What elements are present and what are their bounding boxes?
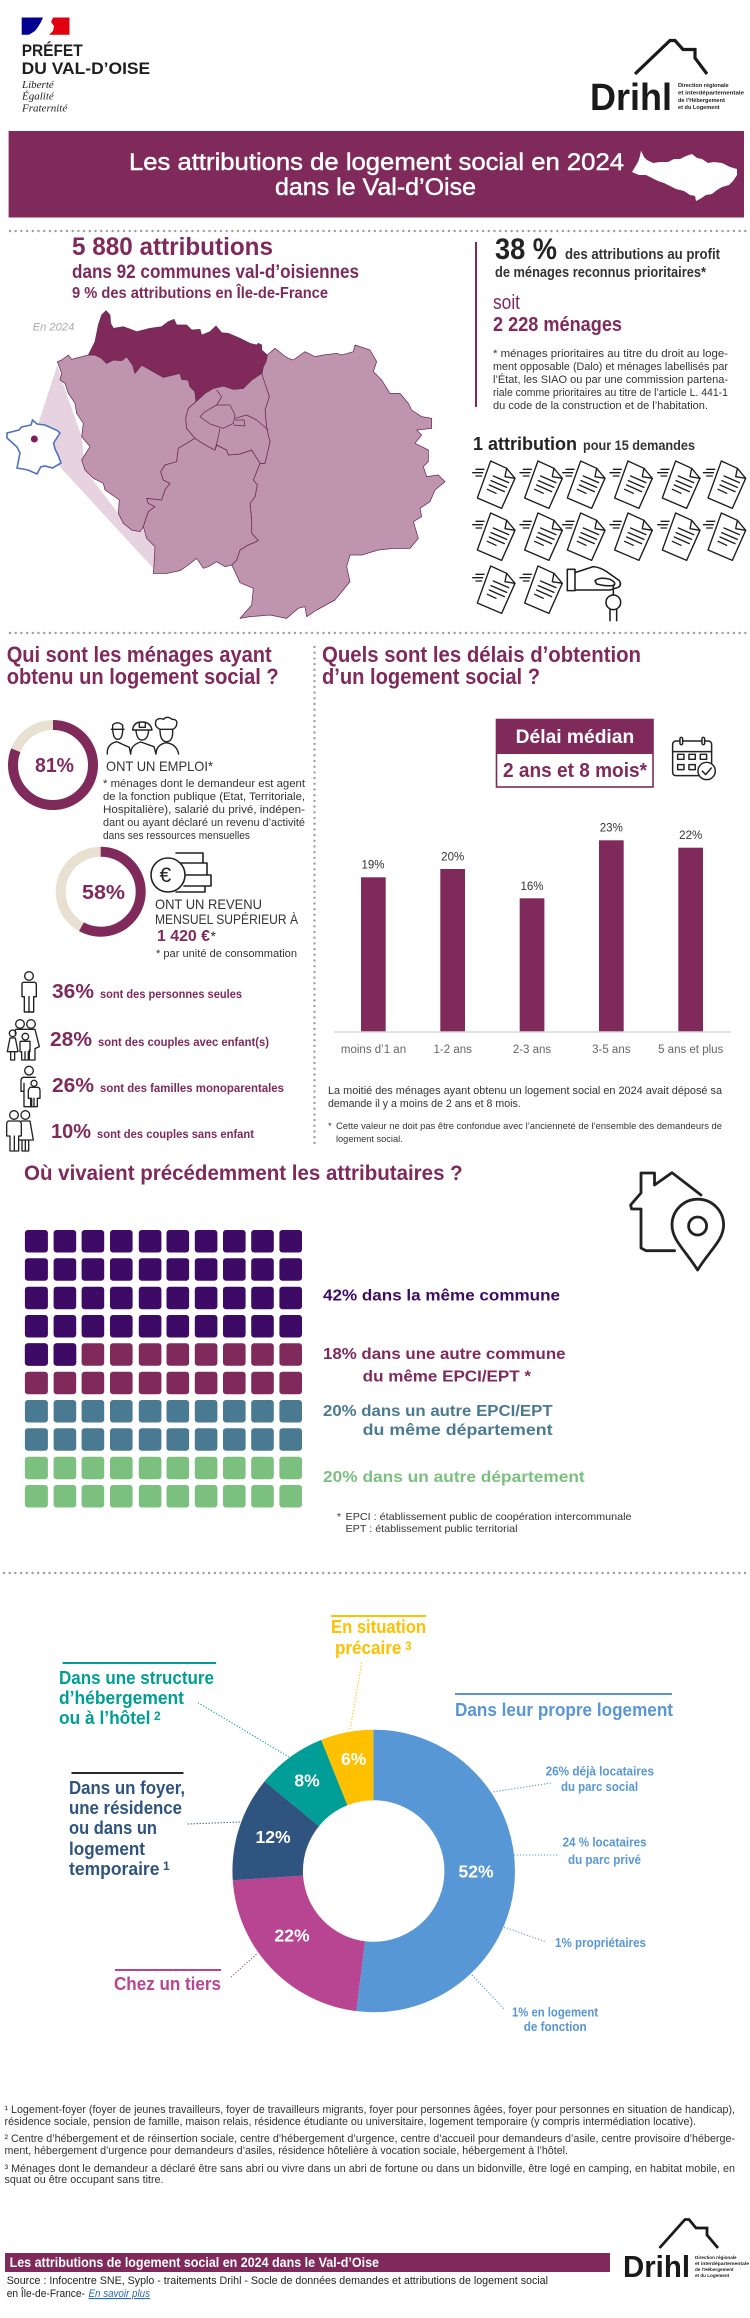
heading: 5 880 attributions	[72, 233, 359, 302]
wedge towards France	[37, 365, 155, 568]
logo: Préfet du Val-d'Oise: Fraternité	[21, 102, 68, 114]
footer banner: Les attributions de logement social en 2024 dans le Val-d’Oise	[10, 2254, 379, 2270]
heading: 1 attribution pour 15 demandes: pour 15 demandes	[583, 438, 695, 453]
bar chart: délais: 23%	[600, 823, 623, 835]
donut: 81%	[13, 725, 93, 805]
footnote: priority households: riale comme prioritaires au titre de l’article L. 441-1	[493, 387, 728, 399]
heading: Où vivaient: Où vivaient précédemment les attributaires ?	[24, 1162, 463, 1185]
footnote: priority households: * ménages prioritaires au titre du droit au loge-	[493, 348, 728, 360]
callout: délai médian: Délai médian	[516, 727, 634, 748]
title: Les attributions de logement social en 2024	[129, 149, 624, 176]
callout: structure d'hébergement	[59, 1662, 289, 1757]
text: explication délai	[328, 1085, 722, 1110]
text: revenu mensuel: ONT UN REVENU	[155, 896, 262, 912]
text: revenu mensuel: MENSUEL SUPÉRIEUR À	[155, 911, 299, 927]
logo: Préfet du Val-d'Oise: PRÉFET	[22, 41, 83, 60]
donut: 58%: 58%	[82, 882, 125, 904]
detail: 26%: du parc social	[561, 1780, 638, 1794]
footnote: EPCI: *	[337, 1512, 341, 1523]
callout: foyer	[69, 1772, 241, 1879]
legend: 20% EPCI	[323, 1403, 553, 1439]
footnote: délai	[328, 1121, 722, 1145]
icon: workers	[107, 717, 179, 754]
pictogram: 14 documents	[473, 461, 746, 613]
logo: Préfet du Val-d'Oise: Égalité	[21, 90, 55, 102]
detail: 1% propriétaires: 1% propriétaires	[555, 1936, 646, 1950]
footnote: priority households	[493, 348, 728, 412]
footnote: employment: * ménages dont le demandeur est agent	[103, 778, 305, 790]
logo: Préfet du Val-d'Oise	[21, 18, 150, 114]
callout: foyer: Dans un foyer,	[69, 1778, 185, 1798]
stat: 2 228 households: 2 228 ménages	[493, 314, 622, 336]
stat: 2 228 households	[493, 292, 622, 336]
logo: Drihl	[590, 40, 744, 119]
logo: Préfet du Val-d'Oise: Liberté	[21, 79, 55, 91]
donut chart: situation antérieure: 52%	[458, 1862, 494, 1882]
text: revenu mensuel: 1 420 €	[157, 928, 210, 945]
callout: en situation précaire: En situation	[331, 1617, 426, 1637]
text: revenu mensuel: * par unité de consommation	[156, 948, 297, 960]
divider	[4, 1572, 746, 1574]
callout: en situation précaire: précaire	[335, 1638, 401, 1658]
detail: 1% logement de fonction	[472, 1975, 599, 2034]
legend: 20% EPCI: du même département	[363, 1422, 553, 1439]
logo: Préfet du Val-d'Oise: DU VAL-D’OISE	[22, 59, 150, 78]
callout: structure d'hébergement: Dans une structure	[59, 1668, 214, 1688]
text: revenu mensuel: *	[210, 928, 216, 944]
icon: coins	[151, 853, 211, 892]
logo: Drihl: et interdépartementale	[678, 90, 744, 96]
icon: coins: €	[160, 864, 172, 887]
divider	[10, 230, 746, 232]
footnotes 1 2 3: ² Centre d’hébergement et de réinsertion sociale, centre d’hébergement d’urgence, centre d’accueil pour demandeurs d’asile, centre provisoire d’héberge-	[4, 2133, 735, 2145]
legend: 18%: 18% dans une autre commune	[323, 1346, 566, 1363]
callout: en situation précaire: 3	[405, 1639, 412, 1653]
heading: 1 attribution pour 15 demandes: 1 attribution	[473, 433, 577, 454]
logo: Drihl: Drihl	[590, 77, 672, 119]
callout: chez un tiers	[114, 1953, 258, 1994]
heading: Qui sont les ménages: Qui sont les ménages ayant	[7, 642, 272, 667]
vertical divider	[313, 647, 316, 1147]
logo: Drihl: et du Logement	[678, 105, 720, 111]
footnote: employment	[103, 778, 306, 842]
callout: foyer: logement	[69, 1839, 145, 1859]
icon: hand holding key	[567, 567, 621, 621]
stat: 28%: 28%	[50, 1028, 92, 1051]
waffle chart	[25, 1230, 302, 1508]
stat: 10%: 10%	[51, 1120, 91, 1143]
heading: Quels sont les délais: Quels sont les délais d’obtention	[322, 642, 641, 667]
footnote: EPCI: EPCI : établissement public de coopération intercommunale	[346, 1512, 632, 1523]
France outline	[7, 420, 61, 474]
detail: 24%	[514, 1836, 647, 1867]
text: revenu mensuel	[155, 896, 299, 960]
bar chart: délais: 16%	[520, 881, 544, 893]
stat: 26%	[52, 1074, 284, 1097]
legend: 42%: 42% dans la même commune	[323, 1288, 560, 1305]
callout: délai médian: 2 ans et 8 mois*	[503, 760, 647, 782]
heading: Qui sont les ménages: obtenu un logement social ?	[7, 664, 279, 689]
icon: single parent family	[21, 1066, 40, 1107]
detail: 26%	[492, 1765, 654, 1794]
title: dans le Val-d’Oise	[275, 174, 476, 201]
source: En savoir plus	[88, 2288, 150, 2300]
callout: dans leur propre logement: Dans leur propre logement	[455, 1700, 673, 1720]
footnotes 1 2 3: résidence sociale, pension de famille, maison relais, résidence étudiante ou universitaire, logement temporaire (y compris intermédiation locative).	[4, 2116, 696, 2128]
Essonne	[143, 438, 260, 573]
legend: 18%	[323, 1346, 566, 1386]
title banner	[9, 131, 744, 218]
detail: 1% logement de fonction: de fonction	[524, 2020, 587, 2034]
callout: foyer: temporaire	[69, 1859, 160, 1879]
stat: 2 228 households: soit	[493, 292, 520, 314]
donut chart: situation antérieure	[255, 1749, 494, 1977]
donut: 81%: 81%	[35, 755, 74, 777]
callout: structure d'hébergement: ou à l’hôtel	[59, 1708, 150, 1728]
bar chart: délais: 22%	[679, 830, 702, 842]
source: en Île-de-France-	[7, 2287, 85, 2300]
icon: calendar	[673, 737, 715, 780]
text: explication délai: demande il y a moins de 2 ans et 8 mois.	[328, 1098, 521, 1110]
heading: 5 880 attributions: 9 % des attributions en Île-de-France	[72, 284, 328, 302]
footer logo: Drihl: Drihl	[623, 2249, 690, 2284]
footnote: employment: dans ses ressources mensuelles	[103, 830, 250, 842]
stat: 10%: sont des couples sans enfant	[97, 1127, 254, 1141]
Seine-et-Marne	[232, 345, 445, 618]
stat: 26%: 26%	[52, 1074, 94, 1097]
footer logo: Drihl: de l’Hébergement	[695, 2267, 734, 2272]
footnote: employment: Hospitalière), salarié du privé, indépen-	[103, 804, 306, 816]
donut chart: situation antérieure: 8%	[294, 1771, 320, 1791]
source	[7, 2275, 548, 2300]
donut chart: situation antérieure: 12%	[255, 1827, 291, 1847]
footer logo: Drihl: Direction régionale	[695, 2255, 737, 2260]
stat: 36%: sont des personnes seules	[100, 987, 242, 1001]
icon: couple with children	[7, 1020, 39, 1060]
heading: Quels sont les délais: d’un logement social ?	[322, 664, 540, 689]
donut chart: situation antérieure: 6%	[341, 1749, 367, 1769]
icon: couple without children	[7, 1111, 33, 1151]
stat: 28%	[50, 1028, 269, 1051]
callout: foyer: une résidence	[69, 1798, 182, 1818]
stat: 38 % priority households	[495, 233, 720, 281]
bar chart: délais	[334, 823, 731, 1056]
icon: single person	[22, 972, 36, 1012]
footnote: délai: Cette valeur ne doit pas être confondue avec l’ancienneté de l’ensemble des demandeurs de	[336, 1121, 722, 1132]
footnote: priority households: l’État, les SIAO ou par une commission partena-	[493, 373, 728, 386]
bar chart: délais: 19%	[361, 860, 385, 872]
heading: Qui sont les ménages	[7, 642, 279, 689]
callout: chez un tiers: Chez un tiers	[114, 1974, 221, 1994]
callout: structure d'hébergement: d’hébergement	[59, 1688, 184, 1708]
donut: 58%	[61, 852, 141, 932]
stat: 38 % priority households: 38 %	[495, 233, 557, 266]
footnotes 1 2 3: squat ou être occupant sans titre.	[4, 2174, 164, 2186]
detail: 1% logement de fonction: 1% en logement	[512, 2006, 599, 2020]
Val-d'Oise	[88, 311, 267, 402]
legend: 20% département: 20% dans un autre département	[323, 1469, 585, 1486]
detail: 26%: 26% déjà locataires	[546, 1765, 654, 1779]
icon: house with pin	[631, 1173, 724, 1270]
footer logo: Drihl	[623, 2220, 749, 2284]
detail: 1% propriétaires	[504, 1927, 646, 1950]
callout: délai médian	[496, 719, 653, 787]
callout: structure d'hébergement: 2	[154, 1709, 161, 1723]
footnotes 1 2 3: ³ Ménages dont le demandeur a déclaré être sans abri ou vivre dans un abri de fortune ou dans un bidonville, être logé en camping, en habitat mobile, en	[4, 2163, 735, 2175]
stat: 38 % priority households: de ménages reconnus prioritaires*	[495, 265, 706, 281]
icon: Val-d'Oise map	[632, 150, 737, 201]
label: En 2024: En 2024	[33, 322, 74, 334]
footnotes 1 2 3	[4, 2104, 735, 2186]
petite couronne	[186, 373, 270, 463]
heading: 1 attribution pour 15 demandes	[473, 433, 695, 454]
footnote: priority households: du code de la construction et de l’habitation.	[493, 400, 708, 412]
heading: 5 880 attributions: 5 880 attributions	[72, 233, 273, 261]
footer logo: Drihl: et du Logement	[695, 2273, 730, 2278]
text: explication délai: La moitié des ménages ayant obtenu un logement social en 2024 avait déposé sa	[328, 1085, 722, 1097]
heading: 5 880 attributions: dans 92 communes val-d’oisiennes	[72, 262, 359, 283]
legend: 18%: du même EPCI/EPT *	[363, 1369, 532, 1386]
bar chart: délais: 3-5 ans	[592, 1044, 631, 1056]
footer banner	[5, 2253, 610, 2272]
logo: Drihl: de l’Hébergement	[678, 98, 725, 104]
stat: 28%: sont des couples avec enfant(s)	[98, 1035, 269, 1049]
callout: en situation précaire	[331, 1615, 426, 1730]
footnote: délai: *	[328, 1121, 332, 1132]
legend: 20% EPCI: 20% dans un autre EPCI/EPT	[323, 1403, 553, 1420]
footer logo: Drihl: et interdépartementale	[695, 2261, 749, 2266]
footnote: employment: dant ou ayant déclaré un revenu d’activité	[103, 817, 305, 829]
detail: 24%: du parc privé	[568, 1853, 641, 1867]
stat: 36%	[52, 980, 242, 1003]
footnotes 1 2 3: ment, hébergement d’urgence pour demandeurs d’asiles, résidence hôtelière à vocation sociale, hébergement à l’hôtel.	[4, 2145, 568, 2157]
text: ont un emploi: ONT UN EMPLOI*	[106, 758, 214, 774]
donut chart: situation antérieure: 22%	[274, 1926, 310, 1946]
map: Île-de-France	[7, 311, 445, 618]
footnote: priority households: ment opposable (Dalo) et ménages labellisés par	[493, 361, 728, 373]
footnotes 1 2 3: ¹ Logement-foyer (foyer de jeunes travailleurs, foyer de travailleurs migrants, foyer pour personnes âgées, foyer pour personnes en situation de handicap),	[4, 2104, 735, 2116]
source: Source : Infocentre SNE, Syplo - traitements Drihl - Socle de données demandes et attributions de logement social	[7, 2275, 548, 2287]
stat: 26%: sont des familles monoparentales	[100, 1081, 284, 1095]
footnote: EPCI: EPT : établissement public territorial	[346, 1524, 518, 1535]
stat: 36%: 36%	[52, 980, 94, 1003]
footnote: délai: logement social.	[336, 1134, 403, 1145]
Yvelines	[57, 355, 196, 532]
callout: foyer: ou dans un	[69, 1818, 157, 1838]
Paris	[200, 405, 235, 428]
footnote: employment: de la fonction publique (Etat, Territoriale,	[103, 791, 305, 803]
footnote: EPCI	[337, 1512, 632, 1535]
bar chart: délais: 5 ans et plus	[658, 1044, 724, 1056]
bar chart: délais: 2-3 ans	[513, 1044, 551, 1056]
callout: foyer: 1	[163, 1859, 170, 1873]
stat: 10%	[51, 1120, 254, 1143]
detail: 24%: 24 % locataires	[563, 1836, 647, 1850]
title	[129, 149, 624, 201]
divider	[10, 632, 746, 634]
logo: Drihl: Direction régionale	[678, 83, 729, 89]
heading: Quels sont les délais	[322, 642, 641, 689]
text: ont un emploi	[103, 758, 306, 842]
stat: 38 % priority households: des attributions au profit	[565, 247, 720, 263]
bar chart: délais: 20%	[441, 852, 464, 864]
bar chart: délais: moins d’1 an	[341, 1044, 406, 1056]
bar chart: délais: 1-2 ans	[434, 1044, 472, 1056]
vertical rule	[475, 242, 477, 407]
